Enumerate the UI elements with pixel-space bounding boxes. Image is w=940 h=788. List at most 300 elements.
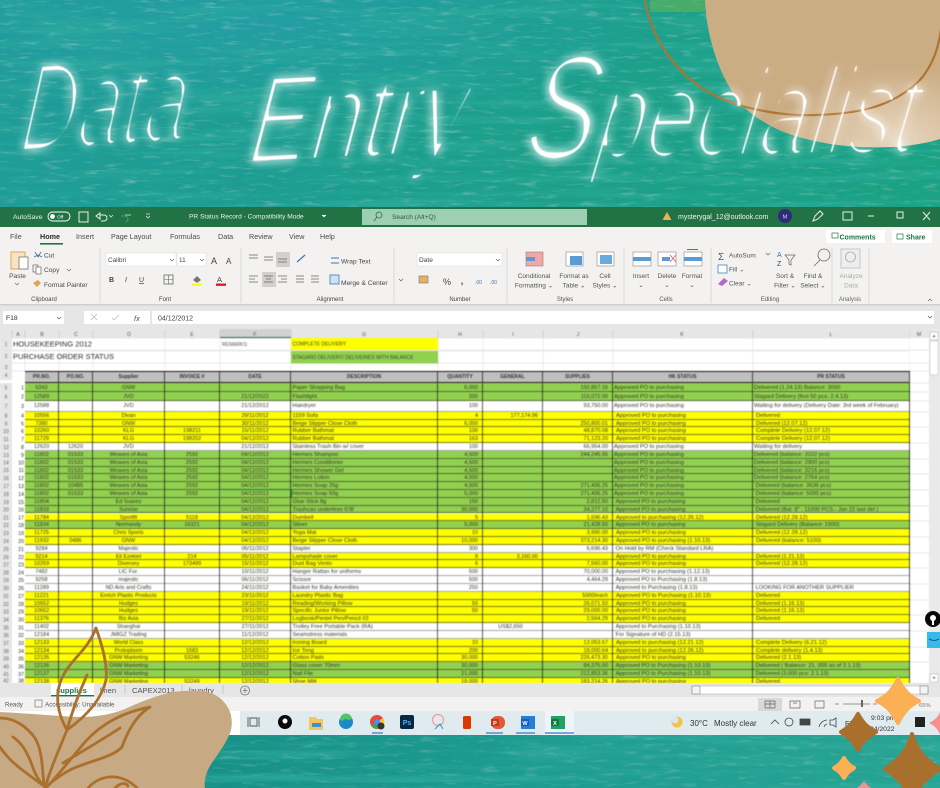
- row numbers column: 23: [3, 531, 9, 537]
- row 6: JVD: [123, 394, 134, 400]
- table header row: PR STATUS: [817, 374, 845, 380]
- row 38: [25, 647, 910, 654]
- row 29: 500: [469, 577, 478, 583]
- row 34: Delivered: [756, 616, 780, 622]
- row 37: World Class: [114, 640, 143, 646]
- row 18: 01533: [68, 491, 83, 497]
- right leaf vein: [63, 728, 120, 763]
- row 12: 66,954.00: [584, 444, 608, 450]
- row 35: Trolley Free Portable Pack (RA): [292, 624, 373, 630]
- row numbers column: 12: [18, 476, 24, 482]
- row 6: 21/12/2022: [241, 394, 269, 400]
- row 35: [25, 623, 910, 631]
- row 15: 11802: [34, 468, 49, 474]
- table header row: PO.NO.: [67, 374, 84, 380]
- styles group: Conditional: [518, 273, 551, 280]
- row 23: 3,990.00: [587, 530, 608, 536]
- title bar: Off: [57, 215, 64, 221]
- row 29: Scissor: [292, 577, 311, 583]
- top painted band: [0, 0, 940, 210]
- right margin and vertical scrollbar: [910, 332, 940, 683]
- row 10: Approved PO to purchasing: [616, 428, 686, 434]
- taskbar icons: P: [493, 721, 497, 727]
- row 33: 50: [472, 608, 478, 614]
- row numbers column: 32: [3, 602, 9, 608]
- row numbers column: 39: [3, 656, 9, 662]
- row 8: 29/11/2012: [241, 413, 269, 419]
- sheet tabs bar: laundry: [189, 686, 214, 695]
- row 36: 11/12/2012: [241, 632, 269, 638]
- table header row: PR.NO.: [33, 374, 50, 380]
- row 38: Approved to purchasing (12.26.12): [616, 648, 704, 654]
- row 21: 1,696.43: [587, 514, 608, 520]
- row 32: 50: [472, 601, 478, 607]
- row 37: Approved to purchasing (12.21.12): [616, 640, 704, 646]
- row 7: Hairdryer: [292, 403, 316, 409]
- row 15: Delivered (balance: 3216 pcs): [754, 468, 830, 474]
- row 33: [25, 607, 910, 615]
- row numbers column: 36: [18, 664, 24, 670]
- row 23: Delivered (12.28.12): [756, 530, 808, 536]
- row 25: [25, 545, 910, 553]
- row numbers column: 18: [18, 523, 24, 529]
- row 39: 12135: [34, 655, 49, 661]
- styles group: Styles ⌄: [593, 282, 617, 290]
- editing group: Sort &: [776, 273, 795, 280]
- row numbers column: 19: [3, 500, 9, 506]
- lower right leaf: [88, 777, 137, 788]
- row 29: majestic: [118, 577, 139, 583]
- row 34: Approved PO to purchasing: [616, 616, 686, 622]
- row 24: 11932: [34, 538, 49, 544]
- row 14: 11802: [34, 460, 49, 466]
- row headings and title block: [0, 337, 910, 380]
- row 35: Shanghai: [117, 624, 140, 630]
- row 34: 27/11/2012: [241, 616, 269, 622]
- row 18: 5,000: [464, 491, 478, 497]
- row 34: Biz Asia: [119, 616, 138, 622]
- row 29: [25, 576, 910, 584]
- table header row: Supplier: [118, 374, 138, 380]
- row 27: [25, 560, 910, 568]
- row 17: 271,406.25: [580, 483, 608, 489]
- row 7: 93,750.00: [584, 403, 608, 409]
- editing group: Filter ⌄: [774, 282, 796, 290]
- row numbers column: 11: [3, 437, 9, 443]
- bottom-left tan blob: [0, 691, 232, 788]
- star: pink right edge: [929, 712, 940, 735]
- row numbers column: 41: [3, 672, 9, 678]
- left leaf: [0, 718, 44, 786]
- row 28: 10/11/2012: [241, 569, 269, 575]
- row 15: 4,500: [464, 468, 478, 474]
- row 8: Approved PO to purchasing: [616, 413, 686, 419]
- styles group: Format as: [559, 273, 589, 280]
- row 18: 04/12/2012: [241, 491, 269, 497]
- row 14: Delivered (balance: 2900 pcs): [754, 460, 830, 466]
- row 14: 01533: [68, 460, 83, 466]
- alignment group: Merge & Center: [341, 280, 388, 287]
- row 13: 01533: [68, 452, 83, 458]
- ribbon tabs: Home: [40, 232, 60, 241]
- row numbers column: 27: [3, 562, 9, 568]
- column headers: I: [512, 332, 514, 338]
- row 17: [25, 482, 910, 490]
- row 12: 100: [469, 444, 478, 450]
- row 34: 11376: [34, 616, 49, 622]
- row 38: 12/12/2012: [241, 648, 269, 654]
- row 32: 19/11/2012: [241, 601, 269, 607]
- star: pink bottom: [857, 781, 871, 788]
- row 34: Logbook/Pentel Pen/Pencil #2: [292, 616, 369, 622]
- row 25: Majestic: [118, 546, 139, 552]
- row numbers column: 14: [3, 460, 9, 466]
- row 7: Approved PO to purchasing: [614, 403, 684, 409]
- row numbers column: 26: [18, 586, 24, 592]
- row numbers column: 13: [3, 453, 9, 459]
- row 8: 10556: [34, 413, 49, 419]
- row numbers column: 10: [18, 460, 24, 466]
- font group: A: [217, 275, 222, 284]
- row 10: 198211: [183, 428, 201, 434]
- row 28: 7482: [35, 569, 48, 575]
- row numbers column: 22: [18, 555, 24, 561]
- row 33: 29,000.00: [584, 608, 608, 614]
- windows taskbar: EN: [845, 721, 855, 728]
- row 23: Chris Sports: [113, 530, 144, 536]
- font group: I: [125, 277, 127, 284]
- row numbers column: 19: [18, 531, 24, 537]
- row 40: 12/12/2012: [241, 663, 269, 669]
- row 12: Stainless Trash Bin w/ cover: [292, 444, 364, 450]
- row 32: Approved PO to purchasing: [616, 601, 686, 607]
- row numbers column: 13: [18, 484, 24, 490]
- row numbers column: 12: [3, 445, 9, 451]
- row numbers column: 35: [18, 656, 24, 662]
- row 28: 500: [469, 569, 478, 575]
- row 40: GNW Marketing: [109, 663, 148, 669]
- row 31: 23/11/2012: [241, 593, 269, 599]
- row 35: US$2,650: [498, 624, 523, 630]
- row 21: 5118: [186, 514, 198, 520]
- row 39: Cotton Pads: [292, 655, 324, 661]
- clipboard group: Copy: [44, 267, 60, 274]
- row 33: Hudges: [119, 608, 138, 614]
- row 40: Approved PO to Purchasing (1.10.13): [616, 663, 710, 669]
- row 37: 12133: [34, 640, 49, 646]
- row 10: Rubber Bathmat: [292, 428, 334, 434]
- row 41: [25, 670, 910, 678]
- row 7: [25, 401, 910, 412]
- number group: .00: [475, 280, 482, 286]
- row 9: Beige Slipper Close Cloth: [292, 420, 357, 426]
- row 14: Approved PO to purchasing: [614, 460, 684, 466]
- row numbers column: 21: [18, 547, 24, 553]
- row 15: Weaves of Asia: [110, 468, 147, 474]
- row 17: Hermes Soap 25g: [292, 483, 338, 489]
- title bar: [0, 207, 940, 227]
- sparkle stars: [834, 679, 940, 788]
- row numbers column: 4: [21, 414, 24, 420]
- row 26: 05/11/2012: [241, 554, 269, 560]
- row 27: 6: [475, 561, 478, 567]
- row numbers column: 35: [3, 626, 9, 632]
- row 41: GNW Marketing: [109, 671, 148, 677]
- top leaf: [58, 628, 106, 730]
- row 14: 2592: [186, 460, 198, 466]
- row 9: Delivered (12.07.12): [756, 420, 808, 426]
- row numbers column: 25: [3, 547, 9, 553]
- row 31: Approved PO to Purchasing (1.10.13): [616, 593, 711, 599]
- row 28: [25, 568, 910, 576]
- row 21: 04/12/2012: [241, 514, 269, 520]
- row numbers column: 17: [18, 516, 24, 522]
- row numbers column: 5: [21, 422, 24, 428]
- title bar: Search (Alt+Q): [392, 214, 436, 221]
- row 10: 15/11/2012: [241, 428, 269, 434]
- row 32: Delivered (1.16.13): [756, 601, 804, 607]
- row 6: 200: [469, 394, 478, 400]
- row 13: 04/12/2012: [241, 452, 269, 458]
- ribbon tabs: Formulas: [170, 232, 200, 241]
- row 6: Flashlight: [292, 394, 317, 400]
- column headers: B: [40, 332, 44, 338]
- editing group: AutoSum: [729, 252, 756, 260]
- row numbers column: 26: [3, 555, 9, 561]
- styles group: Formatting ⌄: [515, 282, 553, 290]
- row 16: Weaves of Asia: [110, 475, 147, 481]
- row 41: 212,853.36: [580, 671, 608, 677]
- row 32: [25, 600, 910, 607]
- row 13: 4,500: [464, 452, 478, 458]
- comments button: [826, 230, 885, 243]
- row 9: 7380: [35, 420, 48, 426]
- row 5: GNW: [122, 385, 135, 391]
- cells group: Delete: [658, 273, 677, 280]
- row 31: 5000/each: [582, 593, 608, 599]
- table header row: QUANTITY: [447, 374, 473, 380]
- top-right tan blob: [705, 0, 940, 147]
- row numbers column: 20: [3, 508, 9, 514]
- cells group: ⌄: [638, 282, 644, 289]
- row 40: Delivered ( Balance: 21, 000 as of 2.1.13): [756, 663, 861, 669]
- row 21: 11784: [34, 514, 49, 520]
- row 24: Delivered (balance: 5100): [756, 538, 821, 544]
- data rows: [24, 382, 911, 683]
- row 13: 244,245.56: [580, 452, 608, 458]
- sheet tabs bar: linen: [100, 686, 116, 695]
- row numbers column: 33: [18, 641, 24, 647]
- row 12: JVD: [123, 444, 134, 450]
- clipboard group: Cut: [44, 252, 54, 260]
- row 18: 2592: [186, 491, 198, 497]
- row 31: Enrich Plastic Products: [100, 593, 157, 599]
- row 9: [25, 420, 910, 427]
- clipboard group: Clipboard: [31, 297, 57, 303]
- row 5: [25, 383, 910, 392]
- star: medium brown: [841, 714, 876, 750]
- row 6: 116,072.00: [581, 394, 608, 400]
- number group: Number: [449, 297, 471, 303]
- row 22: 11834: [34, 522, 49, 528]
- row 11: 71,123.20: [584, 436, 608, 442]
- font group: U: [139, 277, 144, 284]
- row 37: [25, 639, 910, 647]
- row 11: 163: [469, 436, 478, 442]
- font group: A: [211, 256, 217, 266]
- font group: Calibri: [108, 257, 126, 264]
- star: large orange: [877, 679, 919, 723]
- row 13: Delivered (balance: 3102 pcs): [754, 452, 830, 458]
- row numbers column: 17: [3, 484, 9, 490]
- row 12: Approved PO to purchasing: [614, 444, 684, 450]
- row numbers column: 7: [5, 404, 8, 410]
- row 13: Weaves of Asia: [110, 452, 147, 458]
- status bar: 65%: [919, 703, 931, 709]
- alignment group: [249, 252, 403, 303]
- row 36: JMIGZ Trading: [110, 632, 147, 638]
- row 32: Hudges: [119, 601, 138, 607]
- row 38: 12134: [34, 648, 49, 654]
- row 11: Rubber Bathmat: [292, 436, 334, 442]
- row 22: 21,428.55: [584, 522, 608, 528]
- styles group: Cell: [599, 273, 611, 280]
- row 24: 373,214.30: [580, 538, 608, 544]
- row 6: [25, 392, 910, 401]
- row 39: GNW Marketing: [109, 655, 148, 661]
- row 17: 10485: [68, 483, 83, 489]
- ribbon tabs: View: [289, 232, 305, 241]
- font group: 11: [179, 257, 186, 264]
- row 26: 3,160.00: [517, 554, 538, 560]
- row 12: 12620: [34, 444, 49, 450]
- row 15: [25, 466, 910, 474]
- remarks legend: STAGARD DELIVERY/ DELIVERIES WITH BALANCE: [292, 355, 414, 361]
- column headers: A: [16, 332, 20, 338]
- row 38: 18,000.64: [584, 648, 608, 654]
- row 31: Laundry Plastic Bag: [292, 593, 343, 599]
- row numbers column: 6: [21, 429, 24, 435]
- column headers: L: [830, 332, 833, 338]
- row 32: Reading/Working Pillow: [292, 601, 352, 607]
- clipboard group: Format Painter: [44, 282, 88, 289]
- row headings and title block: 3: [5, 365, 8, 371]
- row 11: Complete Delivery (12.07.12): [756, 436, 830, 442]
- editing group: A: [777, 252, 782, 259]
- row 41: Delivered (3,000 pcs: 2.1.13): [756, 671, 829, 677]
- row 14: Hermes Conditioner: [292, 460, 343, 466]
- row 24: 10,000: [461, 538, 478, 544]
- column headers: D: [127, 332, 131, 338]
- row 17: 04/12/2012: [241, 483, 269, 489]
- row 28: Hanger Rattan for uniforms: [292, 569, 361, 575]
- cells group: Cells: [659, 297, 673, 303]
- number group: .00: [490, 280, 497, 286]
- row headings and title block: 4: [5, 373, 8, 379]
- styles group: Table ⌄: [563, 282, 585, 290]
- row numbers column: 18: [3, 492, 9, 498]
- column headers: F: [253, 332, 257, 338]
- row 17: Weaves of Asia: [110, 483, 147, 489]
- row 32: 26,071.50: [584, 601, 608, 607]
- row 20: 34,277.10: [584, 507, 608, 513]
- row 23: 11725: [34, 530, 49, 536]
- row 14: 4,500: [464, 460, 478, 466]
- row 21: [25, 514, 910, 521]
- row 38: Protoplasm: [115, 648, 142, 654]
- row 15: 01533: [68, 468, 83, 474]
- row numbers column: 29: [18, 610, 24, 616]
- row numbers column: 33: [3, 610, 9, 616]
- title bar: PR Status Record - Compatibility Mode: [189, 214, 304, 220]
- row numbers column: 37: [3, 641, 9, 647]
- row numbers column: 7: [21, 437, 24, 443]
- row 25: 6,696.43: [587, 546, 608, 552]
- row 5: Delivered (1.24.13) Balance: 3000: [754, 385, 840, 391]
- font group: Font: [159, 297, 171, 303]
- row numbers column: 15: [3, 468, 9, 474]
- row numbers column: 28: [18, 602, 24, 608]
- row 31: Delivered: [756, 593, 780, 599]
- row numbers column: 9: [21, 453, 24, 459]
- number group: Date: [419, 257, 433, 264]
- row numbers column: 30: [3, 586, 9, 592]
- table header row: GENERAL: [500, 374, 525, 380]
- column headers: H: [458, 332, 462, 338]
- row 30: Basket for Baby Amenities: [292, 585, 359, 591]
- row 13: Approved PO to purchasing: [614, 452, 684, 458]
- row 12: 12620: [68, 444, 83, 450]
- row 12: Waiting for delivery: [754, 444, 802, 450]
- row 13: Hermes Shampoo: [292, 452, 338, 458]
- cells group: ⌄: [664, 282, 670, 289]
- left leaf vein: [13, 737, 44, 786]
- row 22: [25, 521, 910, 529]
- row 8: [25, 412, 910, 420]
- row 10: 48,870.08: [584, 428, 608, 434]
- ribbon separators: [100, 248, 869, 303]
- right leaf: [47, 707, 150, 787]
- row 9: 6,000: [464, 420, 478, 426]
- row 36: 12184: [34, 632, 49, 638]
- row 29: 9258: [35, 577, 48, 583]
- star: large brown: [885, 734, 940, 788]
- row 8: 177,174.96: [510, 413, 538, 419]
- row 33: Approved PO to purchasing: [616, 608, 686, 614]
- column headers: K: [680, 332, 684, 338]
- row numbers column: 15: [18, 500, 24, 506]
- row numbers column: 29: [3, 578, 9, 584]
- row 38: Complete delivery (1.4.13): [756, 648, 823, 654]
- editing group: [718, 249, 830, 303]
- row 8: Divan: [121, 413, 136, 419]
- status bar: Accessibility: Unavailable: [45, 702, 115, 708]
- table header row: DATE: [248, 374, 262, 380]
- clipboard group: [9, 252, 88, 303]
- row numbers column: 36: [3, 633, 9, 639]
- formula bar: fx: [134, 314, 140, 323]
- row 24: Approved PO to purchasing (1.10.13): [616, 538, 710, 544]
- row numbers column: 20: [18, 539, 24, 545]
- top leaf vein and stem: [45, 675, 87, 788]
- row numbers column: 16: [18, 508, 24, 514]
- excel chrome: title bar, ribbon and formula bar: [0, 207, 940, 329]
- number group: ,: [461, 276, 463, 286]
- editing group: Select ⌄: [800, 282, 826, 290]
- row 21: 5: [475, 514, 478, 520]
- row 41: Approved PO to Purchasing (1.10.13): [616, 671, 710, 677]
- number group: %: [443, 277, 451, 287]
